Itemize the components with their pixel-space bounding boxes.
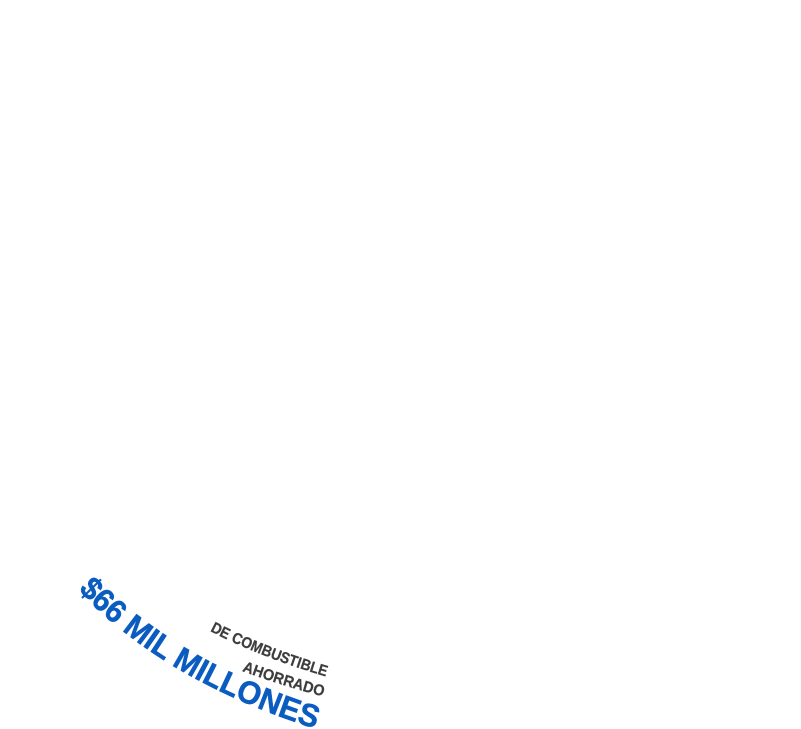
- subtitle: de combustible ahorrado: DE COMBUSTIBLE: [210, 622, 328, 676]
- subtitle: de combustible ahorrado: AHORRADO: [242, 662, 324, 696]
